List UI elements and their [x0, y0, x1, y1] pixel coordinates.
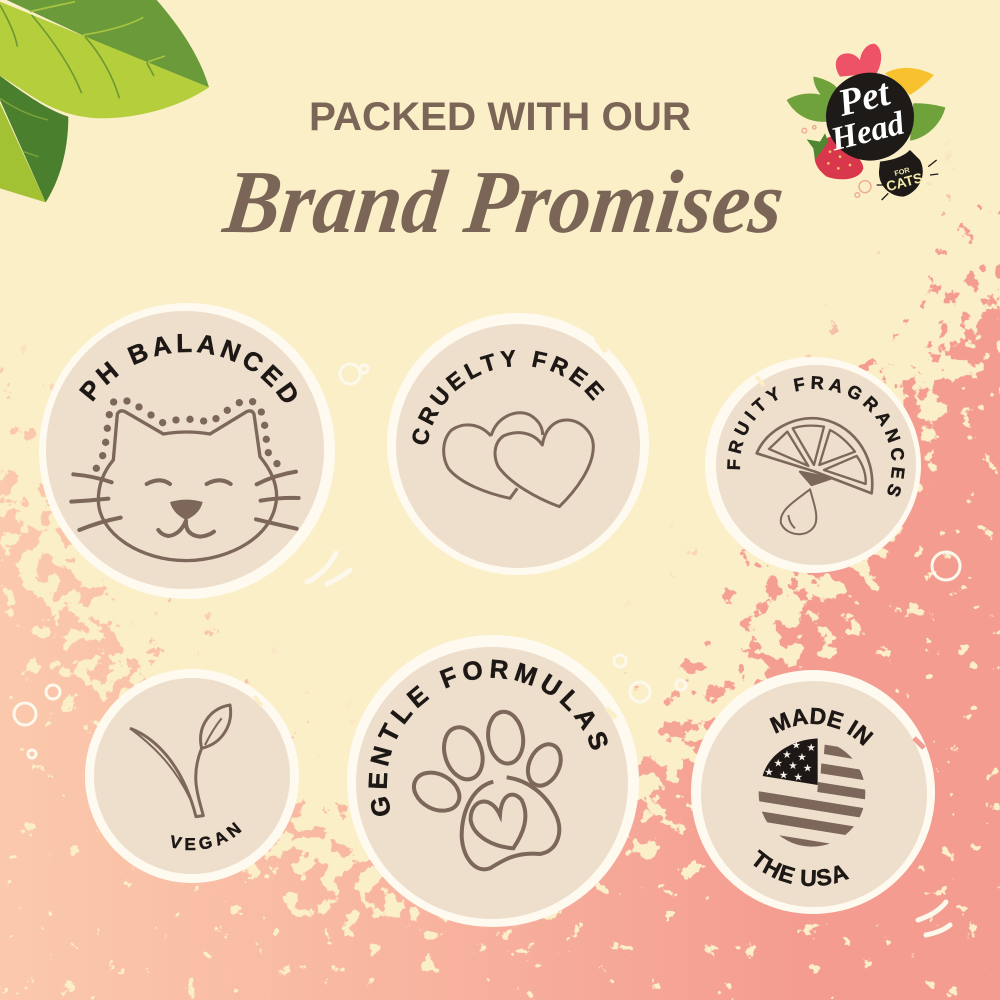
- logo: pet head for cats: Pet: [833, 71, 895, 125]
- bubbles and swooshes: [14, 364, 960, 935]
- logo: pet head for cats: Head: [826, 104, 909, 159]
- icon: citrus slice and drop: [757, 418, 872, 534]
- icon: round american flag: ★: [788, 760, 798, 772]
- icon: two hearts: [444, 413, 593, 507]
- logo: pet head for cats: CATS: [884, 169, 924, 194]
- label: ph balanced: PH BALANCED: [79, 334, 297, 402]
- icon: round american flag: ★: [782, 749, 792, 761]
- badge: cruelty free: [387, 313, 649, 575]
- badge: ph balanced: [39, 303, 335, 599]
- icon: paw with heart: [407, 709, 567, 869]
- title: packed with our: PACKED WITH OUR: [309, 95, 691, 139]
- icon: round american flag: ★: [792, 740, 802, 752]
- icon: round american flag: ★: [794, 772, 804, 784]
- label: fruity fragrances: FRUITY FRAGRANCES: [727, 376, 905, 497]
- icon: round american flag: [758, 738, 866, 847]
- icon: round american flag: ★: [774, 758, 784, 770]
- label: vegan: VEGAN: [171, 822, 242, 850]
- label: cruelty free: CRUELTY FREE: [412, 350, 605, 444]
- leaves top left: [0, 0, 209, 202]
- label: made in: MADE IN: [769, 708, 874, 746]
- icon: round american flag: ★: [807, 742, 817, 754]
- icon: round american flag: ★: [764, 767, 774, 779]
- badge: fruity fragrances: [705, 357, 921, 573]
- badge: made in the usa: [691, 670, 935, 914]
- badge: gentle formulas: [347, 635, 639, 927]
- badge: vegan: [85, 669, 299, 883]
- title: brand promises: Brand Promises: [218, 152, 789, 252]
- icon: round american flag: ★: [779, 769, 789, 781]
- label: the usa: THE USA: [753, 849, 850, 886]
- icon: round american flag: ★: [797, 751, 807, 763]
- label: gentle formulas: GENTLE FORMULAS: [368, 659, 608, 816]
- logo: pet head for cats: FOR: [893, 165, 911, 178]
- icon: cat face: [71, 397, 299, 561]
- icon: round american flag: ★: [803, 763, 813, 775]
- icon: leaf sprout: [130, 705, 231, 817]
- logo: pet head for cats: [787, 44, 945, 200]
